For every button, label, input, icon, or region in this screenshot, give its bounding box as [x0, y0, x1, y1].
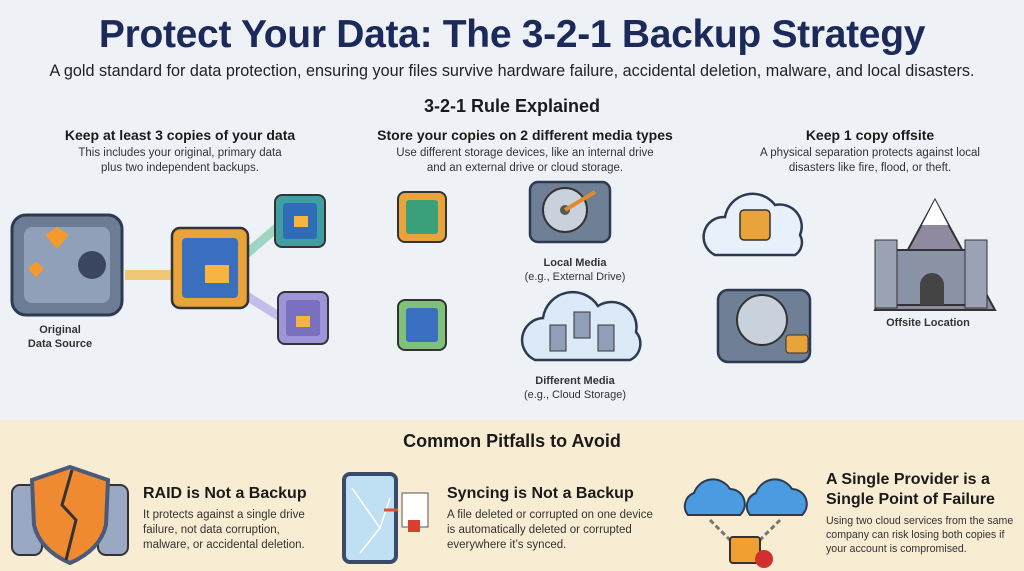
icon: external hard drive	[530, 182, 610, 242]
column 2 text: Use different storage devices, like an internal drive	[396, 147, 654, 159]
title: Protect Your Data: The 3-2-1 Backup Strategy	[99, 13, 925, 56]
label: offsite location: Offsite Location	[886, 317, 970, 329]
column 3 text: Keep 1 copy offsite	[806, 127, 934, 143]
illustration: media types	[397, 180, 642, 362]
subtitle: A gold standard for data protection, ensuring your files survive hardware failure, accidental deletion, malware, and local disasters.	[50, 62, 974, 80]
pitfall 3 text	[826, 471, 1013, 555]
label: different media	[524, 375, 626, 401]
icon: broken tablet and file	[342, 472, 428, 564]
pitfall 3 text: your account is compromised.	[826, 543, 967, 555]
label: local media: (e.g., External Drive)	[525, 271, 625, 283]
pitfall 3 text: A Single Provider is a	[826, 471, 990, 488]
connector arrows	[125, 225, 285, 320]
icon: cube green	[398, 300, 446, 350]
column 2 text	[377, 127, 673, 174]
pitfall 2 text: everywhere it’s synced.	[447, 539, 566, 551]
pitfall 1 text: malware, or accidental deletion.	[143, 539, 305, 551]
pitfall 1 text	[143, 485, 307, 551]
column 1 text: plus two independent backups.	[101, 162, 259, 174]
column 3 text: disasters like fire, flood, or theft.	[789, 162, 951, 174]
label: original data source: Original	[39, 324, 81, 336]
heading: common pitfalls: Common Pitfalls to Avoid	[403, 431, 621, 451]
column 2 text: and an external drive or cloud storage.	[427, 162, 623, 174]
illustration: 3 copies diagram	[10, 194, 329, 345]
label: original data source: Data Source	[28, 338, 92, 350]
pitfall 2 text: is automatically deleted or corrupted	[447, 524, 632, 536]
icon: backup cube purple	[278, 292, 328, 344]
column 1 text: This includes your original, primary data	[78, 147, 282, 159]
icon: cloud with cube	[704, 194, 802, 255]
icon: hard drive with lock	[718, 290, 810, 362]
icon: primary cube	[172, 228, 248, 308]
pitfall 3 text: Using two cloud services from the same	[826, 515, 1013, 527]
pitfall 2 text: A file deleted or corrupted on one device	[447, 509, 653, 521]
pitfall 1 text: RAID is Not a Backup	[143, 485, 307, 502]
label: local media: Local Media	[544, 257, 606, 269]
icon: two clouds chained with lock	[684, 478, 808, 568]
section heading: 3-2-1 Rule Explained: 3-2-1 Rule Explained	[424, 96, 600, 116]
column 3 text: A physical separation protects against local	[760, 147, 980, 159]
column 2 text: Store your copies on 2 different media types	[377, 127, 673, 143]
label: local media	[525, 257, 625, 283]
column 3 text	[760, 127, 980, 174]
pitfall 1 text: It protects against a single drive	[143, 509, 305, 521]
icon: cloud with servers	[522, 292, 640, 360]
pitfall 3 text: company can risk losing both copies if	[826, 529, 1004, 541]
icon: mountain castle	[875, 200, 995, 310]
icon: cube orange	[398, 192, 446, 242]
pitfall 3 text: Single Point of Failure	[826, 491, 995, 508]
pitfall 2 text: Syncing is Not a Backup	[447, 485, 634, 502]
label: original data source	[28, 324, 92, 350]
label: different media: Different Media	[535, 375, 615, 387]
column 1 text	[65, 127, 296, 174]
column 1 text: Keep at least 3 copies of your data	[65, 127, 295, 143]
panel: common pitfalls	[0, 420, 1024, 571]
illustration: offsite	[702, 192, 997, 364]
pitfall 1 text: failure, not data corruption,	[143, 524, 280, 536]
pitfall 2 text	[447, 485, 653, 551]
icon: safe original data	[12, 215, 122, 315]
icon: broken shield on servers	[11, 465, 129, 565]
label: different media: (e.g., Cloud Storage)	[524, 389, 626, 401]
icon: backup cube green	[275, 195, 325, 247]
